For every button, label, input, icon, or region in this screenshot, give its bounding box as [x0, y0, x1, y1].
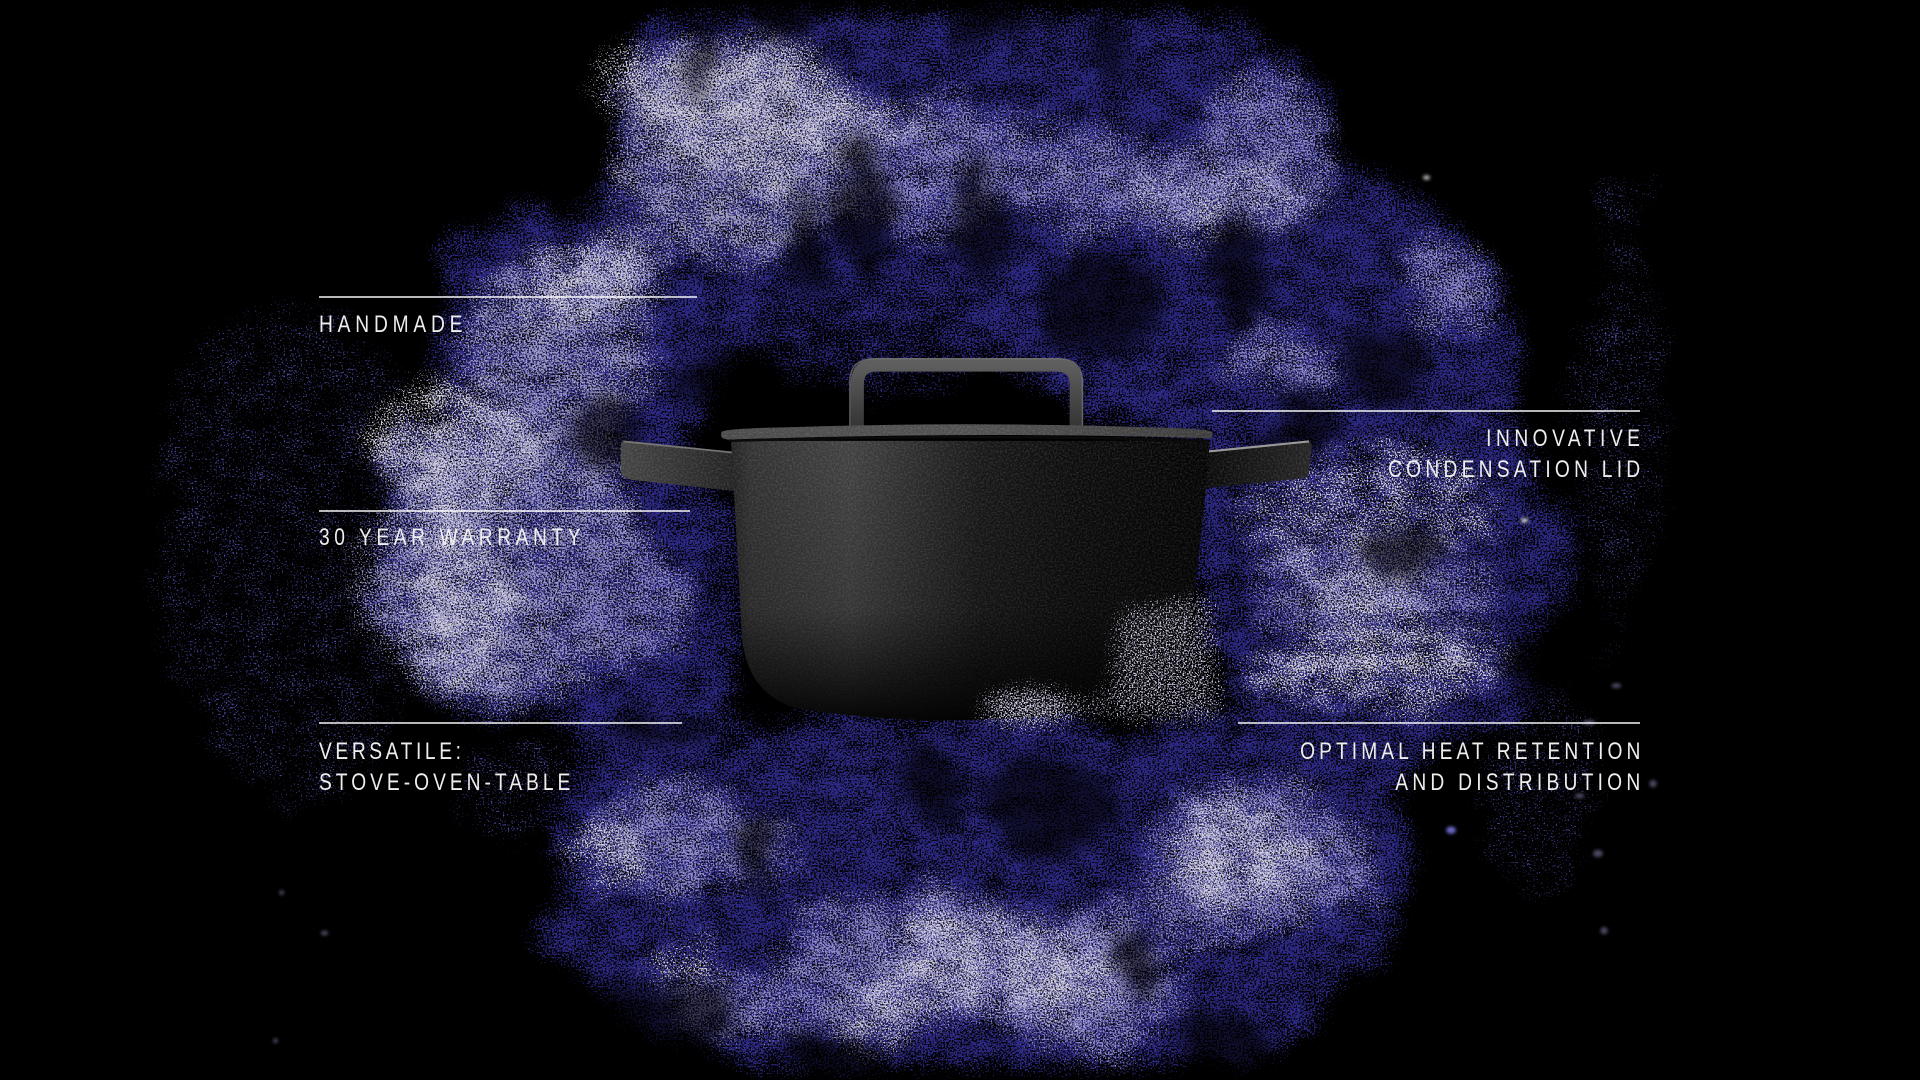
callout: innovative condensation lid: INNOVATIVE — [1486, 425, 1644, 452]
callout: handmade: HANDMADE — [319, 311, 467, 338]
lid handle — [850, 359, 1082, 429]
sparse outer particles — [135, 159, 1678, 906]
pot — [621, 359, 1312, 720]
dust drifting over the pot — [961, 576, 1237, 740]
callout: innovative condensation lid — [1212, 410, 1644, 482]
pale grey dust layer — [343, 12, 1602, 1074]
lavender dust layer — [337, 24, 1531, 1078]
callout: versatile — [319, 722, 682, 796]
pot body — [731, 441, 1210, 720]
callout: 30 year warranty: 30 YEAR WARRANTY — [319, 524, 585, 551]
callout: optimal heat retention and distribution: OPTIMAL HEAT RETENTION — [1300, 738, 1644, 765]
black pockets and streaks — [580, 0, 1580, 1080]
lid — [721, 424, 1212, 441]
left handle — [621, 441, 735, 491]
callout: optimal heat retention and distribution — [1238, 722, 1644, 796]
callout: versatile: VERSATILE: — [319, 738, 465, 765]
deep violet dust layer — [343, 0, 1586, 1080]
right handle — [1202, 441, 1312, 489]
callout: versatile: STOVE-OVEN-TABLE — [319, 768, 574, 796]
callout: optimal heat retention and distribution: AND DISTRIBUTION — [1395, 768, 1644, 796]
callout: innovative condensation lid: CONDENSATION LID — [1388, 456, 1644, 482]
stray droplets — [273, 175, 1657, 1043]
